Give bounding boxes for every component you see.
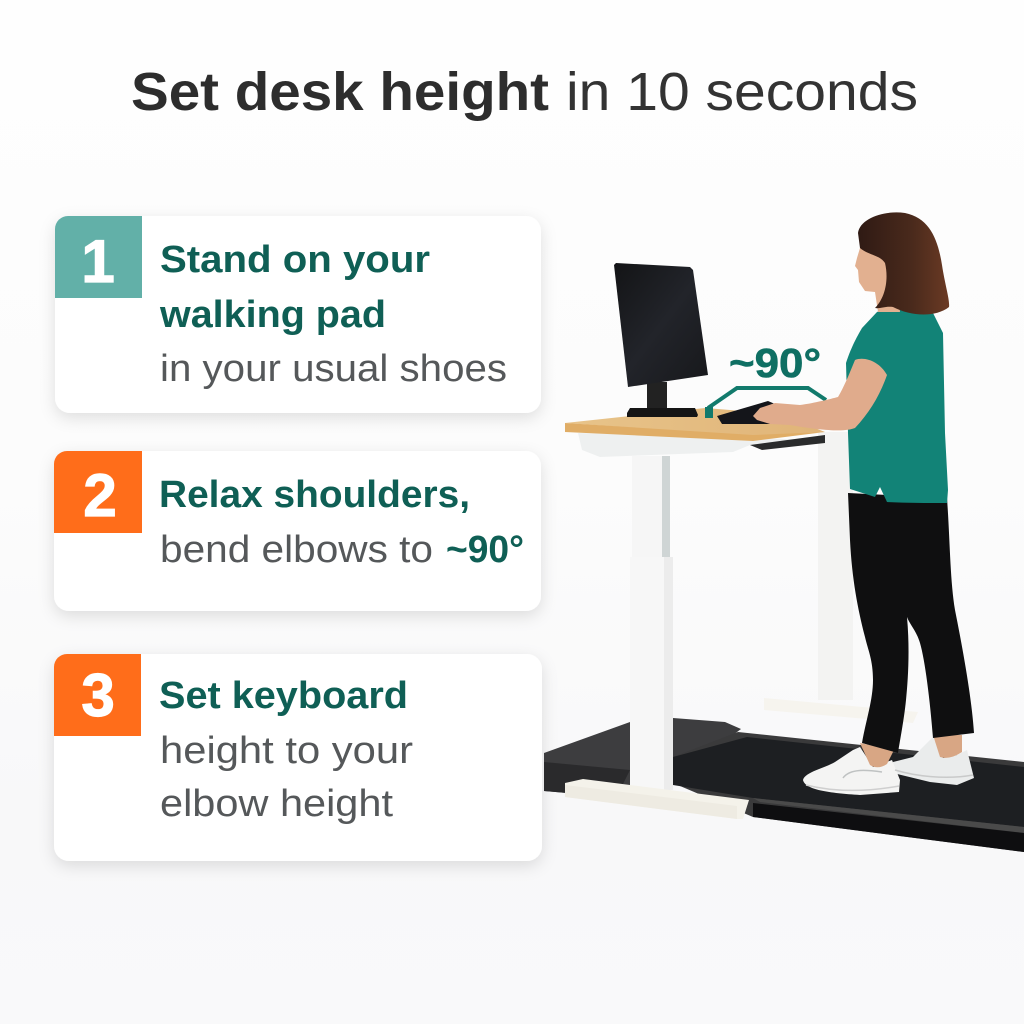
step 2 text: ~90°	[446, 529, 524, 571]
ankles	[860, 735, 962, 767]
person	[753, 212, 974, 795]
step 3 text: height to your	[160, 730, 413, 772]
arm and hand	[753, 359, 887, 430]
step 1 text: in your usual shoes	[160, 348, 507, 390]
step 3 text: Set keyboard	[159, 675, 408, 717]
monitor	[614, 263, 708, 417]
panel: step 1	[55, 216, 541, 413]
step 3 number badge: 3	[81, 662, 115, 729]
step 3 text	[159, 675, 413, 825]
illustration: person at standing desk on walking pad	[544, 212, 1024, 852]
~90 degree angle marker: ~90°	[729, 340, 821, 386]
step 2 text	[159, 474, 524, 571]
desk top	[565, 408, 825, 441]
title: in 10 seconds	[566, 62, 918, 122]
title: Set desk height	[131, 62, 549, 122]
step 3 number badge	[54, 654, 141, 736]
hair	[858, 212, 949, 315]
rear desk leg	[764, 432, 918, 723]
neck and face	[855, 245, 900, 312]
shoes	[803, 737, 974, 795]
walking pad	[544, 718, 1024, 852]
step 1 number badge: 1	[81, 228, 115, 295]
keyboard tray	[750, 435, 825, 450]
step 1 text: walking pad	[159, 294, 386, 336]
step 1 number badge	[55, 216, 142, 298]
panel: step 3	[54, 654, 542, 861]
~90 degree angle marker	[705, 340, 826, 418]
front desk leg	[565, 456, 749, 819]
step 2 number badge	[54, 451, 142, 533]
step 1 text: Stand on your	[160, 239, 430, 281]
keyboard	[717, 401, 782, 424]
pants	[848, 493, 974, 753]
step 1 text	[159, 239, 507, 390]
desk frame	[578, 433, 820, 457]
title	[131, 62, 918, 122]
panel: step 2	[54, 451, 541, 611]
shirt	[846, 306, 948, 503]
step 3 text: elbow height	[160, 783, 393, 825]
step 2 text: bend elbows to	[160, 529, 433, 571]
step 2 text: Relax shoulders,	[159, 474, 470, 516]
step 2 number badge: 2	[83, 462, 117, 529]
